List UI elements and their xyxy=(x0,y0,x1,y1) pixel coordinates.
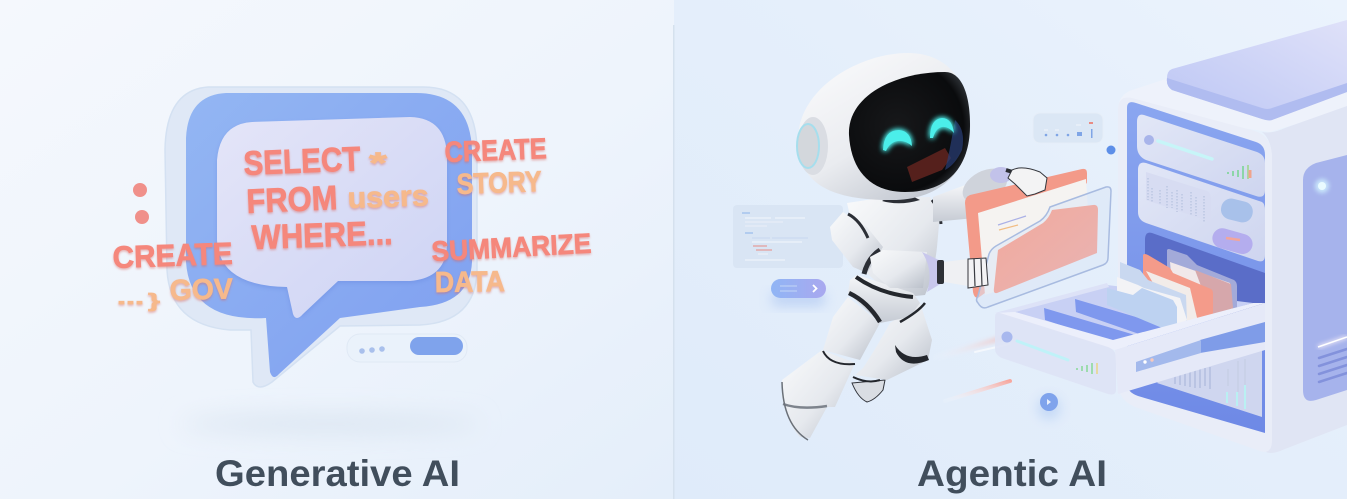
robot upper hand on folder xyxy=(1008,168,1047,196)
server front face xyxy=(1118,98,1272,452)
SQL query text: SELECT xyxy=(243,140,361,183)
dark drawer cavity xyxy=(1145,233,1265,330)
SQL query text xyxy=(243,140,429,257)
wrist cuff and hand xyxy=(922,252,968,292)
bubble floor shadow xyxy=(180,416,480,432)
SQL query text: * xyxy=(369,147,387,180)
side panel xyxy=(1303,155,1347,401)
raised arm xyxy=(933,161,1016,222)
floating colon dots xyxy=(133,183,149,224)
robot xyxy=(782,53,1016,440)
label: create gov: } xyxy=(148,291,161,312)
blue dot xyxy=(1106,146,1116,154)
panel: generative AI background xyxy=(0,0,674,499)
folder paper xyxy=(978,179,1088,295)
label: create gov: CREATE xyxy=(112,236,233,275)
panel: agentic AI illustration xyxy=(733,20,1347,453)
label: create story xyxy=(444,133,547,201)
held folder xyxy=(965,168,1111,308)
label: summarize data: SUMMARIZE xyxy=(431,228,592,267)
inner lavender bubble xyxy=(217,117,447,318)
code snippet card xyxy=(733,205,843,268)
server cabinet xyxy=(995,20,1347,453)
heading: generative AI: Generative AI xyxy=(215,453,460,494)
lower arm xyxy=(830,212,927,288)
input pill control xyxy=(347,334,467,362)
label: summarize data: DATA xyxy=(435,266,505,299)
label: summarize data xyxy=(431,228,592,299)
top plate xyxy=(1167,20,1347,120)
middle module xyxy=(1138,163,1265,261)
server top face xyxy=(1118,20,1347,132)
SQL query text: users xyxy=(347,180,429,215)
panel: generative AI illustration xyxy=(112,87,592,432)
icon: glass speech bubble xyxy=(165,87,477,387)
drawer front rim xyxy=(995,303,1265,350)
recessed front bay xyxy=(1127,102,1265,433)
upper module xyxy=(1137,115,1265,197)
front leg xyxy=(782,297,880,440)
label: create gov: GOV xyxy=(169,273,234,307)
ear disc xyxy=(797,117,828,175)
glass folder front xyxy=(976,187,1111,308)
SQL query text: FROM xyxy=(246,179,338,221)
label: create gov xyxy=(112,236,234,312)
filed folders xyxy=(1107,249,1237,330)
play dot xyxy=(1038,393,1060,419)
heading: agentic AI: Agentic AI xyxy=(917,453,1107,494)
label: create gov: ... xyxy=(117,288,144,308)
drawer dividers xyxy=(1044,308,1135,342)
server right side xyxy=(1262,106,1347,453)
head xyxy=(797,53,970,200)
visor xyxy=(849,72,970,192)
pelvis xyxy=(848,275,925,323)
drawer side with slider xyxy=(1115,303,1265,394)
SQL query text: WHERE... xyxy=(251,214,393,257)
arrow button xyxy=(771,279,826,306)
torso xyxy=(847,196,941,298)
drawer front xyxy=(995,313,1116,394)
panel: agentic AI background xyxy=(674,0,1347,499)
inner bubble shadow xyxy=(217,119,447,316)
open drawer xyxy=(995,249,1265,394)
label: create story: CREATE xyxy=(444,133,547,169)
drawer tray floor xyxy=(1015,285,1253,342)
label: create story: STORY xyxy=(456,166,542,201)
status mini card xyxy=(1033,113,1103,143)
back leg xyxy=(852,303,932,402)
visor reflection xyxy=(907,148,951,182)
hand front of folder xyxy=(968,258,988,288)
lower module xyxy=(1157,340,1262,417)
glowing eyes xyxy=(883,118,954,151)
speed streaks xyxy=(935,338,1010,401)
drawer back rim xyxy=(995,283,1109,313)
folder back xyxy=(965,169,1087,298)
